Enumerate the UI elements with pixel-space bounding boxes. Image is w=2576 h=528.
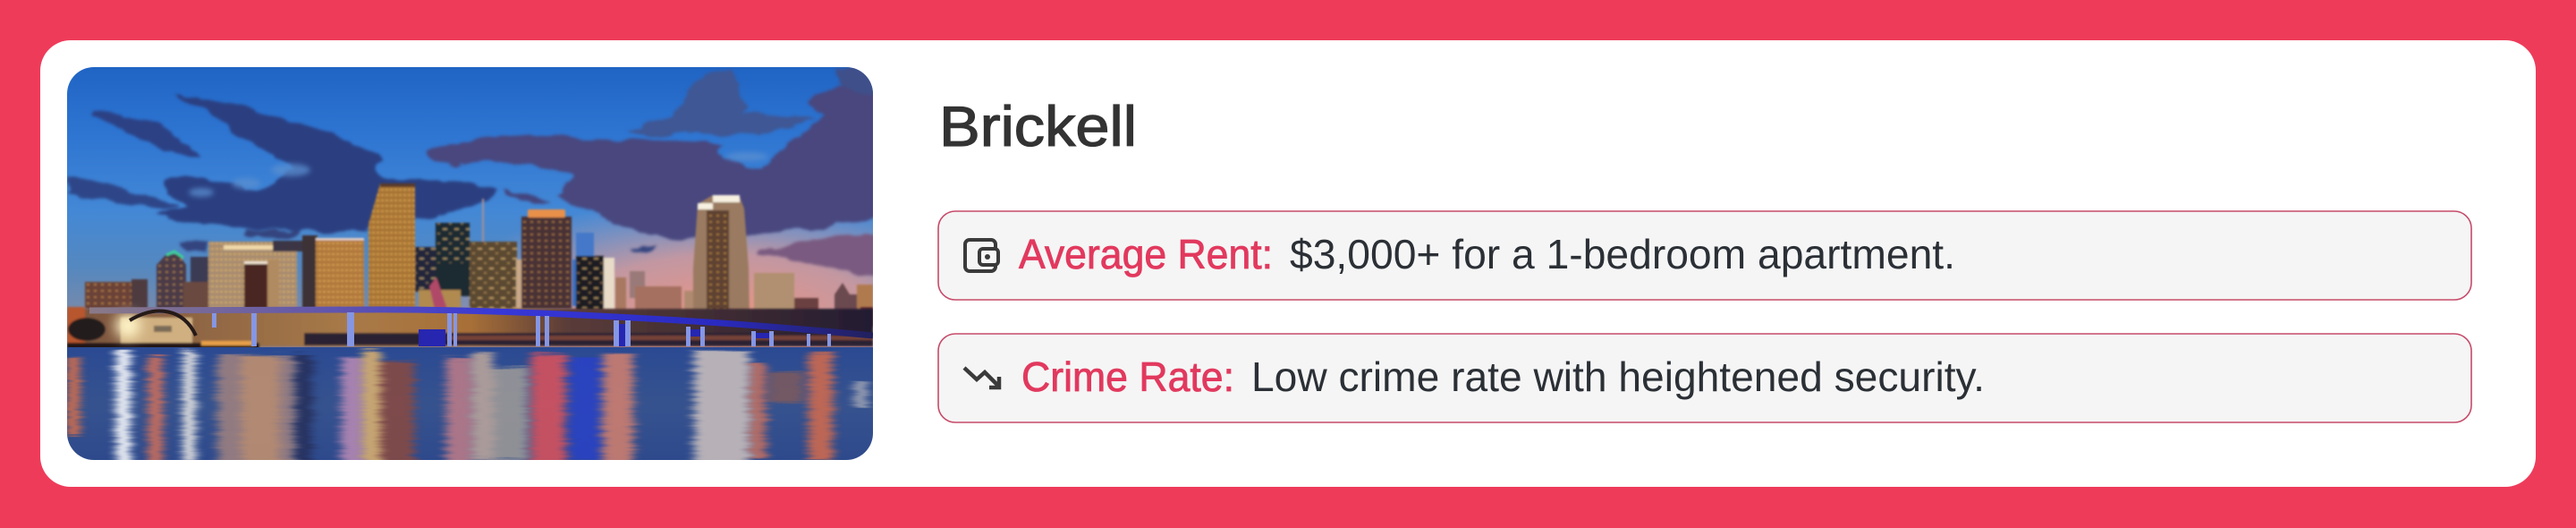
heading: Brickell: Brickell: [939, 96, 1137, 158]
label: average rent: Average Rent:: [1019, 231, 1273, 277]
value: crime: Low crime rate with heightened security.: [1251, 353, 1985, 400]
sky: [67, 67, 873, 347]
label: crime rate: Crime Rate:: [1021, 353, 1234, 400]
breaks of sky inside clouds: [189, 152, 768, 197]
clouds: [67, 67, 890, 278]
water with reflections: [67, 347, 873, 464]
value: rent: $3,000+ for a 1-bedroom apartment.: [1290, 231, 1955, 277]
skyline buildings: [85, 183, 873, 345]
under-bridge waterfront: [67, 307, 873, 349]
panel: crime rate: [938, 334, 2471, 422]
photo: Miami skyline at dusk: [67, 67, 873, 460]
icon: wallet: [965, 240, 998, 271]
bridge with blue-lit piers: [89, 310, 873, 346]
icon: trending down arrow: [964, 368, 999, 387]
panel: average rent: [938, 211, 2471, 300]
light glow: [115, 313, 140, 338]
